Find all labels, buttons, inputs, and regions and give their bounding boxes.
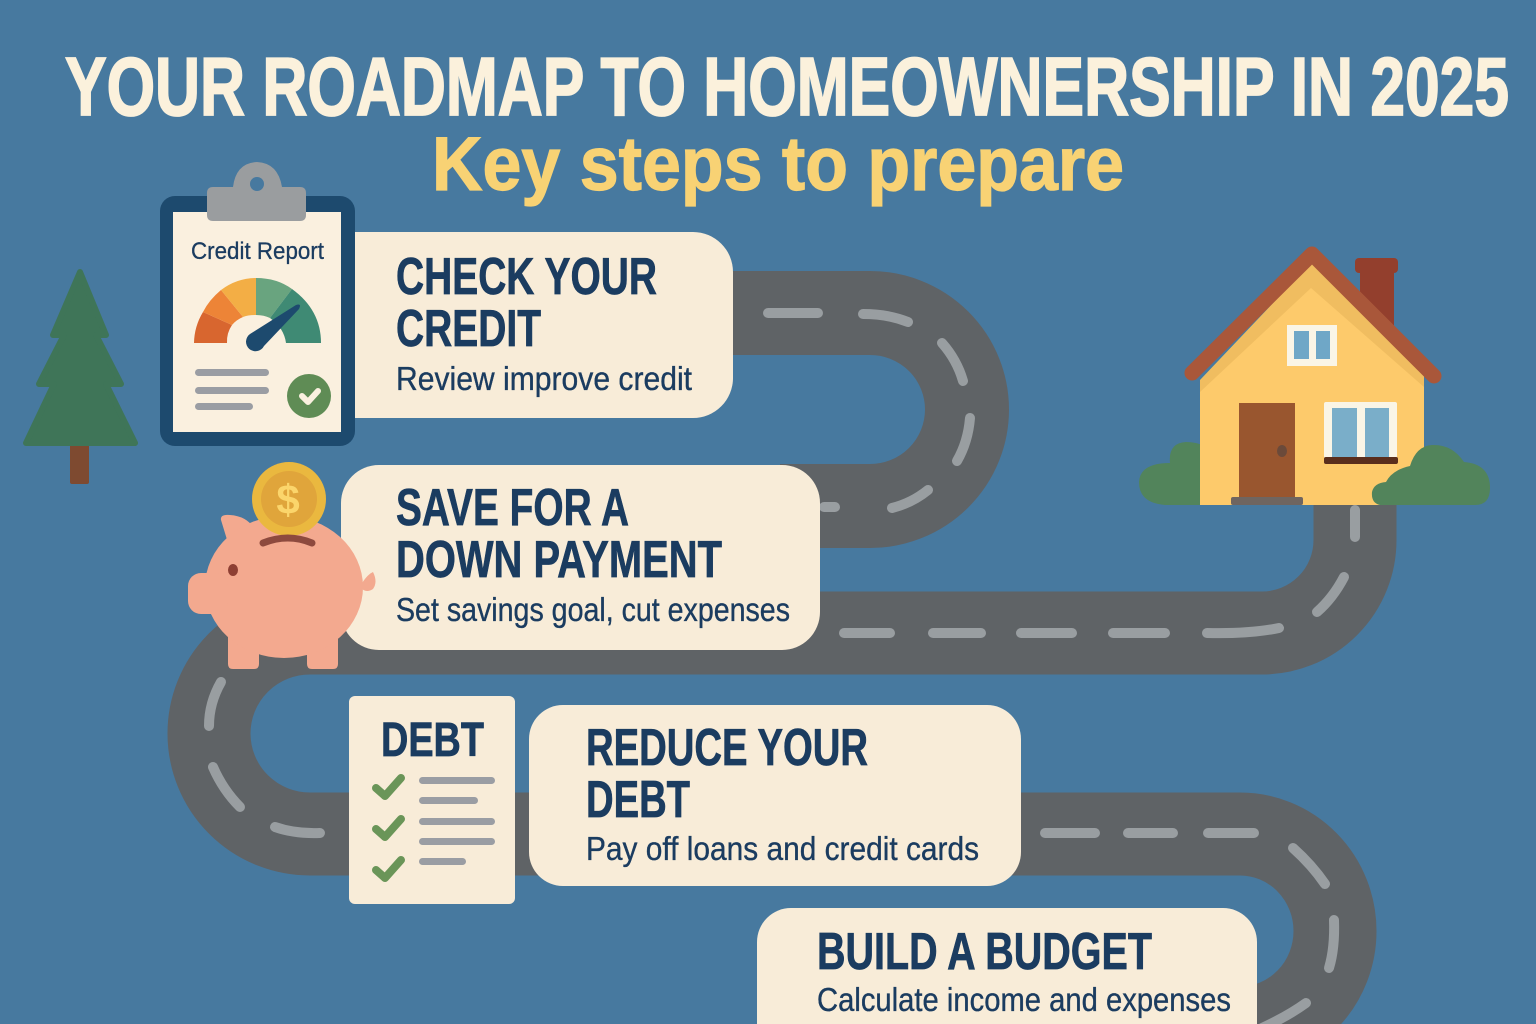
panel: debt checklist paper xyxy=(349,696,515,904)
icon: piggy bank with coin xyxy=(188,462,376,669)
panel: save for a down payment card: DOWN PAYMENT xyxy=(396,531,722,589)
heading: build a budget: BUILD A BUDGET xyxy=(817,923,1152,981)
icon: dollar coin xyxy=(252,462,326,536)
panel: check your credit card: Review improve credit xyxy=(396,360,692,397)
panel: save for a down payment card: Set savings goal, cut expenses xyxy=(396,591,790,628)
panel: check your credit card xyxy=(340,232,733,418)
chimney xyxy=(1355,258,1398,335)
label: credit report: Credit Report xyxy=(191,238,324,265)
gauge xyxy=(194,278,321,351)
label: debt: DEBT xyxy=(381,714,484,767)
panel: build a budget card xyxy=(757,908,1257,1024)
heading: check your credit: CHECK YOUR xyxy=(396,248,657,306)
lower window xyxy=(1324,402,1398,464)
panel: reduce your debt card: DEBT xyxy=(586,771,690,829)
subtitle: Key steps to prepare xyxy=(432,122,1124,207)
road: winding path to the house xyxy=(209,313,1355,1024)
door xyxy=(1231,403,1303,505)
upper window xyxy=(1287,325,1337,366)
panel: reduce your debt card: Pay off loans and credit cards xyxy=(586,830,979,867)
left bush xyxy=(1139,442,1205,505)
panel: save for a down payment card xyxy=(341,465,820,650)
checkmarks xyxy=(376,778,401,878)
icon: house with bushes xyxy=(1139,254,1490,505)
heading: save for a down payment: SAVE FOR A xyxy=(396,479,629,537)
icon: dollar coin: $ xyxy=(276,476,300,523)
panel: reduce your debt card xyxy=(529,705,1021,886)
panel: check your credit card: CREDIT xyxy=(396,300,541,358)
heading: reduce your debt: REDUCE YOUR xyxy=(586,719,868,777)
icon: check badge xyxy=(287,374,331,418)
panel: build a budget card: Calculate income and expenses xyxy=(817,981,1231,1018)
right bush xyxy=(1372,445,1490,505)
icon: pine tree xyxy=(26,272,135,484)
icon: credit report clipboard xyxy=(160,162,355,446)
